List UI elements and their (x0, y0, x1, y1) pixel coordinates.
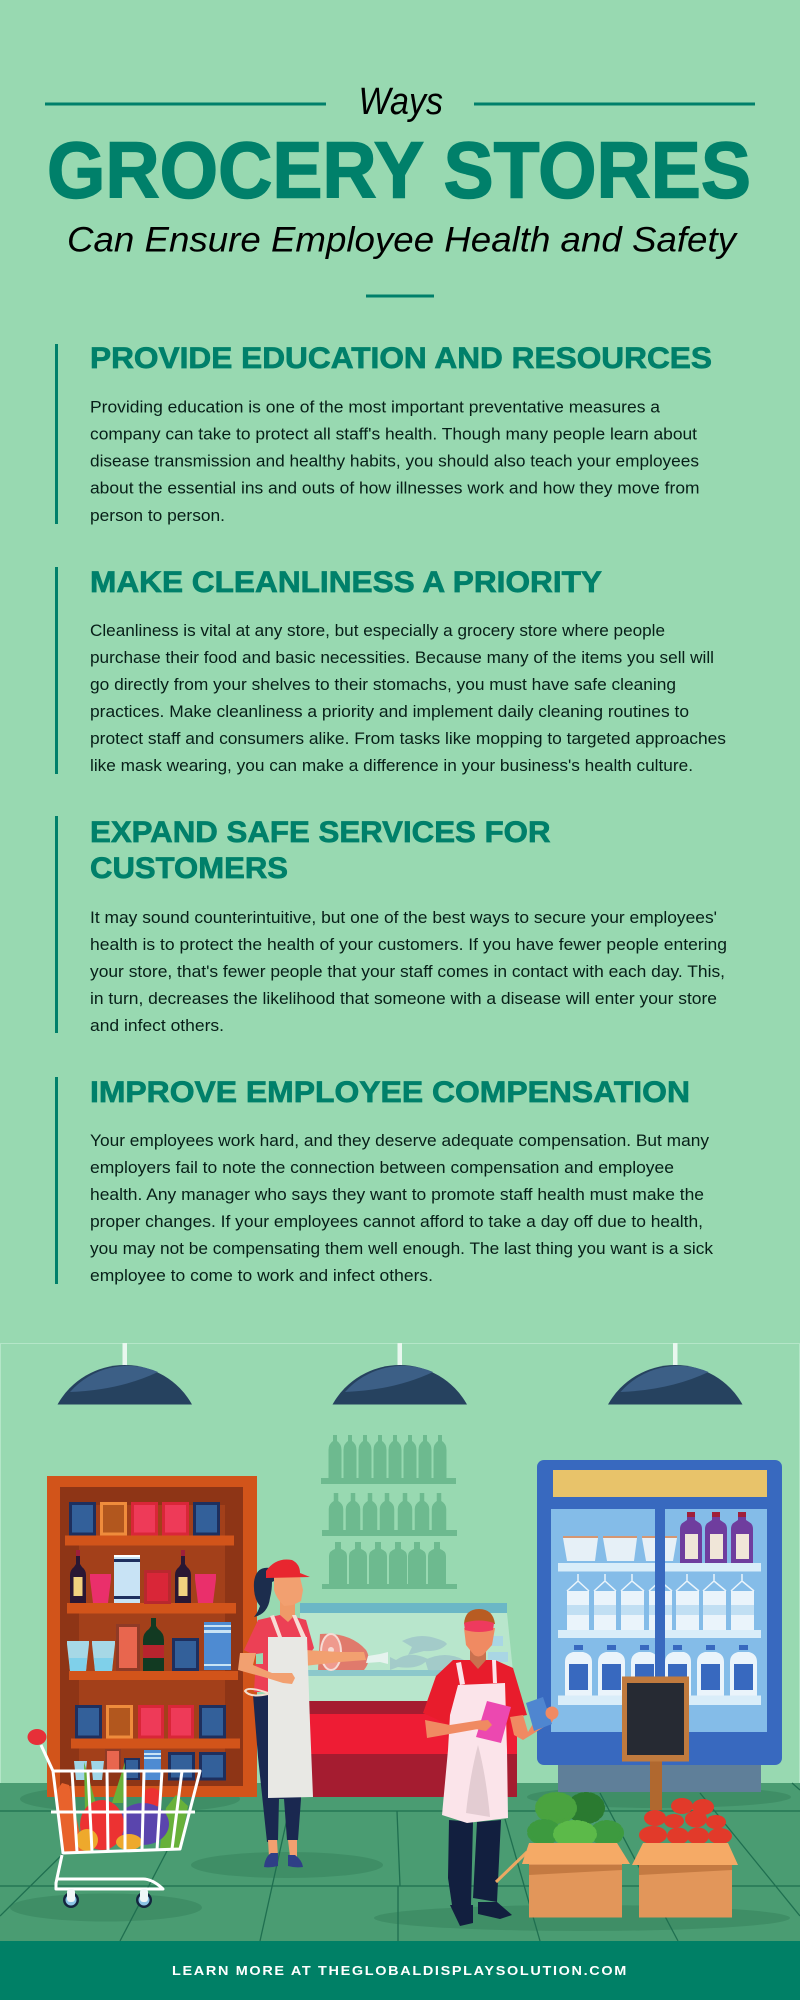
illustration: grocery store scene (0, 1343, 800, 1941)
section heading 3: EXPAND SAFE SERVICES FOR (90, 816, 551, 849)
shelf row 2 bottles and cans (70, 1550, 216, 1603)
fridge bottom row: jugs (565, 1645, 757, 1696)
straps (456, 1660, 497, 1685)
cap (464, 1609, 495, 1624)
fridge shelves (558, 1563, 761, 1705)
refrigerator (537, 1460, 782, 1792)
apron (268, 1637, 313, 1798)
product shelf unit (47, 1476, 257, 1797)
heading: Grocery Stores: GROCERY STORES (47, 126, 751, 214)
floor (0, 1783, 800, 1941)
red counter (307, 1701, 517, 1797)
section body 3: health is to protect the health of your customers. If you have fewer people entering (90, 935, 727, 954)
head (274, 1577, 303, 1606)
pink notebook (476, 1701, 511, 1743)
blue notebook (526, 1697, 552, 1731)
gap between arm and body (256, 1653, 263, 1664)
small packs (488, 1636, 508, 1662)
arms (425, 1707, 558, 1740)
chalkboard sign (622, 1676, 689, 1810)
hand over notebook (476, 1720, 492, 1731)
fridge top row (563, 1512, 753, 1563)
section body 2: practices. Make cleanliness a priority and implement daily cleaning routines to (90, 702, 689, 721)
section: expand safe services for customers (55, 816, 727, 1035)
cart contents (57, 1762, 188, 1852)
section body 3: in turn, decreases the likelihood that someone with a disease will enter your store (90, 989, 717, 1008)
ham (318, 1634, 388, 1670)
neck (470, 1650, 486, 1669)
back wall bottle shelves (321, 1435, 457, 1589)
section body 1: about the essential ins and outs of how illnesses work and how they move from (90, 478, 700, 498)
section heading 1: PROVIDE EDUCATION AND RESOURCES (90, 342, 712, 375)
header: title block (45, 81, 755, 298)
cardboard box: greens (496, 1843, 630, 1918)
section body 4: employers fail to note the connection between compensation and employee (90, 1158, 674, 1177)
section body 3 (90, 908, 727, 1035)
section body 4: Your employees work hard, and they deserve adequate compensation. But many (90, 1131, 710, 1150)
section body 4: you may not be compensating them well enough. The last thing you want is a sick (90, 1239, 714, 1258)
produce: tomatoes (639, 1798, 732, 1844)
shelf row 5 items (74, 1750, 224, 1780)
head (464, 1628, 495, 1656)
cart wheels (63, 1889, 152, 1908)
footer banner: LEARN MORE AT THEGLOBALDISPLAYSOLUTION.COM (172, 1963, 628, 1978)
legs (253, 1695, 303, 1867)
hand over blue notebook (546, 1706, 558, 1720)
shelf row 4 boxes (76, 1706, 224, 1737)
cap (266, 1559, 310, 1578)
section body 4: proper changes. If your employees cannot afford to take a day off due to health, (90, 1212, 703, 1231)
section body 1 (90, 398, 700, 525)
heading: Ways: Ways (358, 81, 443, 123)
section heading 3: CUSTOMERS (90, 852, 288, 885)
deli display case (300, 1603, 517, 1797)
section heading 4: IMPROVE EMPLOYEE COMPENSATION (90, 1076, 690, 1109)
section: provide education and resources (55, 342, 712, 525)
hair (254, 1568, 285, 1617)
cardboard box: tomatoes (632, 1843, 738, 1918)
section body 2: go directly from your shelves to their stomachs, you must have safe cleaning (90, 675, 676, 694)
shirt (244, 1614, 314, 1692)
section body 2: purchase their food and basic necessities. Because many of the items you sell will (90, 648, 714, 667)
apron (442, 1683, 508, 1823)
legs (448, 1820, 512, 1926)
produce: leafy greens (529, 1794, 622, 1846)
section body 2: Cleanliness is vital at any store, but especially a grocery store where people (90, 621, 665, 640)
shelf row 3 cups and bottle (67, 1618, 231, 1671)
footer banner (0, 1941, 800, 2000)
section body 3: It may sound counterintuitive, but one of the best ways to secure your employees' (90, 908, 717, 927)
section body 4: employee to come to work and infect others. (90, 1266, 433, 1285)
section body 2: like mask wearing, you can make a difference in your business's health culture. (90, 756, 693, 775)
arm: reaching (304, 1650, 366, 1666)
section heading 3 (90, 816, 551, 885)
section body 1: Providing education is one of the most important preventative measures a (90, 398, 661, 416)
section body 3: and infect others. (90, 1016, 224, 1035)
section body 3: your store, that's fewer people that your staff comes in contact with each day. This, (90, 962, 725, 981)
straps (270, 1615, 306, 1637)
section body 1: disease transmission and healthy habits, you should also teach your employees (90, 452, 699, 470)
section body 2 (90, 621, 726, 775)
arm: near (238, 1653, 295, 1684)
fridge middle row: milk cartons (567, 1574, 754, 1630)
fish (390, 1636, 464, 1670)
neck (280, 1600, 295, 1622)
section: make cleanliness a priority (55, 566, 726, 775)
cart handle (28, 1729, 46, 1745)
section: improve employee compensation (55, 1076, 714, 1285)
icon: hanging lamps (58, 1343, 742, 1404)
section body 4 (90, 1131, 714, 1285)
shelf row 1 boxes (70, 1504, 218, 1534)
section body 4: health. Any manager who says they want to promote staff health must make the (90, 1185, 704, 1204)
woman employee (238, 1559, 366, 1867)
shopping cart (28, 1729, 200, 1908)
section body 1: person to person. (90, 506, 225, 525)
section body 2: protect staff and consumers alike. From tasks like mopping to targeted approaches (90, 729, 726, 748)
shirt (423, 1660, 527, 1760)
section heading 2: MAKE CLEANLINESS A PRIORITY (90, 566, 602, 599)
subtitle: Can Ensure Employee Health and Safety (67, 220, 738, 260)
man employee (423, 1609, 558, 1926)
cart frame (41, 1745, 200, 1889)
section body 1: company can take to protect all staff's health. Though many people learn about (90, 424, 697, 444)
